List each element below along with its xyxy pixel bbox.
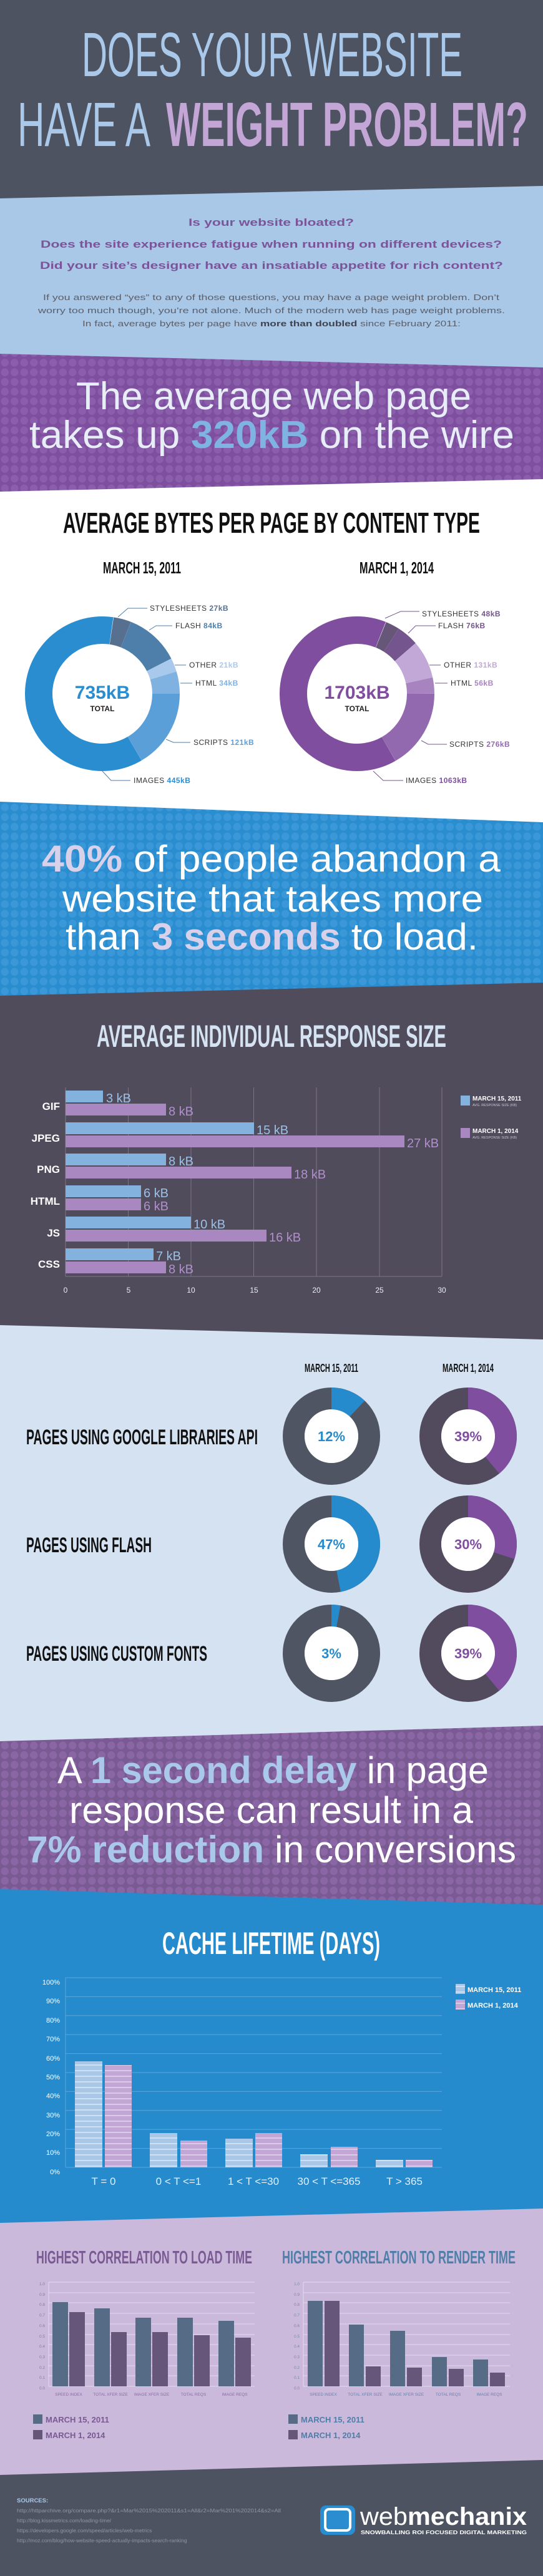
panel: usage donuts: MARCH 15, 2011 xyxy=(305,1362,358,1374)
callout: 320kB xyxy=(29,375,514,457)
bar chart: response size: 10 kB xyxy=(193,1218,225,1232)
bar chart: render time: 0.0 xyxy=(294,2386,300,2391)
bar chart: cache lifetime: 1 < T <=30 xyxy=(228,2175,279,2187)
title: HAVE A xyxy=(17,90,150,160)
bar chart: response size: 8 kB xyxy=(169,1263,193,1276)
bar chart: load time: 0.2 xyxy=(39,2366,45,2370)
bar chart: response size: 15 kB xyxy=(257,1124,288,1137)
panel: usage donuts: PAGES USING FLASH xyxy=(26,1533,152,1557)
bar chart: cache lifetime: 20% xyxy=(46,2131,60,2138)
legend: MARCH 1, 2014 xyxy=(301,2431,361,2440)
bar chart: response size: JPEG xyxy=(32,1132,60,1144)
sources: http://moz.com/blog/how-website-speed-actually-impacts-search-ranking xyxy=(17,2537,187,2544)
callout: 40% abandon: 40% of people abandon a xyxy=(42,838,501,880)
callout: 1 second delay: response can result in a xyxy=(69,1789,474,1831)
bar chart: load time: 0.9 xyxy=(39,2293,45,2297)
panel: usage donuts xyxy=(26,1362,506,1691)
donut 2011: OTHER 21kB xyxy=(189,661,238,669)
legend: MARCH 15, 2011 xyxy=(46,2415,109,2424)
donut 2011: STYLESHEETS 27kB xyxy=(150,604,228,613)
panel: usage donuts: 30% xyxy=(454,1537,482,1552)
intro questions xyxy=(40,216,503,271)
donut 2011: IMAGES 445kB xyxy=(134,776,190,785)
callout: 40% abandon xyxy=(42,838,501,958)
bar chart: load time xyxy=(33,2282,255,2440)
bar chart: response size: 6 kB xyxy=(144,1187,169,1200)
bar chart: response size: 5 xyxy=(127,1286,131,1295)
bar chart: render time: 0.1 xyxy=(294,2376,300,2380)
donut 2011: 735kB xyxy=(75,683,130,703)
heading: load time correlation: HIGHEST CORRELATION TO LOAD TIME xyxy=(36,2248,252,2268)
donut 2014: TOTAL xyxy=(345,704,369,713)
panel: usage donuts: 39% xyxy=(454,1429,482,1444)
panel: usage donuts: 39% xyxy=(454,1646,482,1661)
donut 2011: TOTAL xyxy=(90,704,114,713)
callout: 1 second delay: 7% reduction in conversions xyxy=(27,1829,516,1870)
bar chart: render time: 0.6 xyxy=(294,2324,300,2328)
intro questions: Did your site’s designer have an insatiable appetite for rich content? xyxy=(40,260,503,271)
panel: usage donuts: 12% xyxy=(318,1429,345,1444)
panel: usage donuts: PAGES USING CUSTOM FONTS xyxy=(26,1642,207,1666)
bar chart: render time: 0.2 xyxy=(294,2366,300,2370)
bar chart: render time: 0.8 xyxy=(294,2303,300,2307)
bar chart: load time: TOTAL REQS xyxy=(181,2393,207,2397)
sources: http://httparchive.org/compare.php?&r1=Mar%2015%202011&s1=All&r2=Mar%201%202014&s2=All xyxy=(17,2507,281,2514)
bar chart: cache lifetime: 0 < T <=1 xyxy=(156,2175,201,2187)
logo: webmechanix xyxy=(320,2503,527,2535)
bar chart: render time: 0.3 xyxy=(294,2355,300,2360)
callout: 1 second delay xyxy=(27,1749,516,1870)
bar chart: load time: 0.0 xyxy=(39,2386,45,2391)
bar chart: render time: 1.0 xyxy=(294,2282,300,2287)
bar chart: cache lifetime: 50% xyxy=(46,2074,60,2081)
bar chart: response size: 8 kB xyxy=(169,1155,193,1169)
bar chart: load time: 0.5 xyxy=(39,2335,45,2339)
legend: MARCH 1, 2014 xyxy=(467,2002,519,2010)
intro paragraph: In fact, average bytes per page have more than doubled since February 2011: xyxy=(82,319,461,328)
donut 2014 xyxy=(267,558,510,785)
intro questions: Does the site experience fatigue when running on different devices? xyxy=(41,238,502,250)
bar chart: response size: 8 kB xyxy=(169,1105,193,1119)
bar chart: render time: IMAGE XFER SIZE xyxy=(389,2393,424,2397)
callout: 40% abandon: than 3 seconds to load. xyxy=(66,916,478,958)
bar chart: load time: 0.4 xyxy=(39,2345,45,2349)
callout: 40% abandon: website that takes more xyxy=(62,878,483,920)
donut 2014: 1703kB xyxy=(324,683,390,703)
callout: 320kB: takes up 320kB on the wire xyxy=(29,414,514,457)
bar chart: load time: 1.0 xyxy=(39,2282,45,2287)
bar chart: cache lifetime: T > 365 xyxy=(386,2175,423,2187)
bar chart: load time: SPEED INDEX xyxy=(55,2393,83,2397)
callout: 320kB: The average web page xyxy=(76,375,471,418)
logo: webmechanix: webmechanix xyxy=(360,2503,527,2530)
bar chart: response size: GIF xyxy=(42,1101,60,1112)
intro paragraph xyxy=(37,293,505,328)
intro paragraph: worry too much though, you’re not alone. Much of the modern web has page weight problems. xyxy=(37,306,505,315)
bar chart: render time: SPEED INDEX xyxy=(310,2393,338,2397)
bar chart: load time: IMAGE XFER SIZE xyxy=(134,2393,170,2397)
bar chart: render time xyxy=(288,2282,510,2440)
bar chart: load time: TOTAL XFER SIZE xyxy=(93,2393,128,2397)
legend xyxy=(456,1984,521,2010)
bar chart: cache lifetime: 10% xyxy=(46,2149,60,2157)
bar chart: response size: 20 xyxy=(312,1286,321,1295)
donut 2014: OTHER 131kB xyxy=(444,661,497,669)
bar chart: response size xyxy=(31,1087,522,1295)
donut 2014: HTML 56kB xyxy=(451,679,494,688)
intro questions: Is your website bloated? xyxy=(188,216,354,228)
heading: cache lifetime: CACHE LIFETIME (DAYS) xyxy=(162,1926,380,1961)
legend: MARCH 15, 2011 xyxy=(472,1096,522,1102)
donut 2014: MARCH 1, 2014 xyxy=(360,558,434,577)
bar chart: response size: JS xyxy=(47,1227,60,1239)
bar chart: response size: 27 kB xyxy=(407,1137,439,1150)
bar chart: load time: 0.8 xyxy=(39,2303,45,2307)
bar chart: cache lifetime xyxy=(42,1978,521,2187)
bar chart: response size: 25 xyxy=(375,1286,384,1295)
bar chart: response size: 3 kB xyxy=(106,1092,131,1106)
bar chart: load time: IMAGE REQS xyxy=(222,2393,248,2397)
bar chart: render time: 0.9 xyxy=(294,2293,300,2297)
callout: 1 second delay: A 1 second delay in page xyxy=(57,1749,489,1791)
bar chart: response size: 15 xyxy=(250,1286,258,1295)
bar chart: render time: 0.4 xyxy=(294,2345,300,2349)
sources: http://blog.kissmetrics.com/loading-time/ xyxy=(17,2517,112,2524)
bar chart: cache lifetime: 90% xyxy=(46,1998,60,2005)
donut 2011: MARCH 15, 2011 xyxy=(103,558,181,577)
donut 2011: SCRIPTS 121kB xyxy=(193,738,254,747)
donut 2014: SCRIPTS 276kB xyxy=(449,740,510,749)
bar chart: response size: 0 xyxy=(64,1286,68,1295)
bar chart: load time: 0.7 xyxy=(39,2313,45,2318)
bar chart: load time: 0.3 xyxy=(39,2355,45,2360)
legend: AVG. RESPONSE SIZE (KB) xyxy=(472,1104,517,1107)
bar chart: cache lifetime: 80% xyxy=(46,2017,60,2024)
bar chart: render time: IMAGE REQS xyxy=(476,2393,502,2397)
bar chart: response size: PNG xyxy=(37,1164,60,1175)
bar chart: render time: TOTAL XFER SIZE xyxy=(348,2393,383,2397)
donut 2014: FLASH 76kB xyxy=(438,621,486,630)
intro paragraph: If you answered “yes” to any of those questions, you may have a page weight problem. Don’t xyxy=(43,293,500,302)
bar chart: response size: 10 xyxy=(187,1286,195,1295)
bar chart: response size: CSS xyxy=(38,1258,60,1270)
legend: MARCH 15, 2011 xyxy=(467,1986,521,1994)
legend xyxy=(33,2414,109,2440)
panel: usage donuts: 47% xyxy=(318,1537,345,1552)
bar chart: cache lifetime: 100% xyxy=(42,1979,60,1986)
logo: webmechanix: SNOWBALLING ROI FOCUSED DIGITAL MARKETING xyxy=(361,2529,527,2535)
bar chart: cache lifetime: 60% xyxy=(46,2055,60,2063)
bar chart: response size: 30 xyxy=(438,1286,446,1295)
bar chart: cache lifetime: 30% xyxy=(46,2112,60,2119)
panel: usage donuts: MARCH 1, 2014 xyxy=(443,1362,494,1374)
title xyxy=(17,20,528,160)
bar chart: response size: HTML xyxy=(31,1195,60,1207)
legend: AVG. RESPONSE SIZE (KB) xyxy=(472,1136,517,1140)
legend: MARCH 1, 2014 xyxy=(472,1128,519,1135)
bar chart: load time: 0.1 xyxy=(39,2376,45,2380)
bar chart: cache lifetime: 0% xyxy=(50,2169,60,2176)
sources: https://developers.google.com/speed/articles/web-metrics xyxy=(17,2527,152,2534)
legend: MARCH 1, 2014 xyxy=(46,2431,105,2440)
bar chart: response size: 7 kB xyxy=(156,1250,181,1263)
bar chart: cache lifetime: 40% xyxy=(46,2092,60,2100)
donut 2011 xyxy=(15,558,254,785)
sources xyxy=(17,2497,281,2544)
legend: MARCH 15, 2011 xyxy=(301,2415,364,2424)
bar chart: response size: 18 kB xyxy=(294,1168,326,1182)
donut 2011: FLASH 84kB xyxy=(175,621,223,630)
donut 2014: IMAGES 1063kB xyxy=(406,776,467,785)
donut 2014: STYLESHEETS 48kB xyxy=(422,610,501,618)
bar chart: cache lifetime: 30 < T <=365 xyxy=(297,2175,361,2187)
bar chart: response size: 6 kB xyxy=(144,1200,169,1213)
legend xyxy=(461,1096,522,1140)
donut 2011: HTML 34kB xyxy=(195,679,238,688)
bar chart: render time: TOTAL REQS xyxy=(436,2393,461,2397)
panel: usage donuts: 3% xyxy=(321,1646,341,1661)
bar chart: render time: 0.5 xyxy=(294,2335,300,2339)
bar chart: response size: 16 kB xyxy=(269,1231,301,1245)
panel: usage donuts: PAGES USING GOOGLE LIBRARIES API xyxy=(26,1426,258,1449)
bar chart: render time: 0.7 xyxy=(294,2313,300,2318)
bar chart: cache lifetime: 70% xyxy=(46,2036,60,2043)
bar chart: cache lifetime: T = 0 xyxy=(92,2175,115,2187)
sources: SOURCES: xyxy=(17,2497,48,2504)
legend xyxy=(288,2414,364,2440)
bar chart: load time: 0.6 xyxy=(39,2324,45,2328)
